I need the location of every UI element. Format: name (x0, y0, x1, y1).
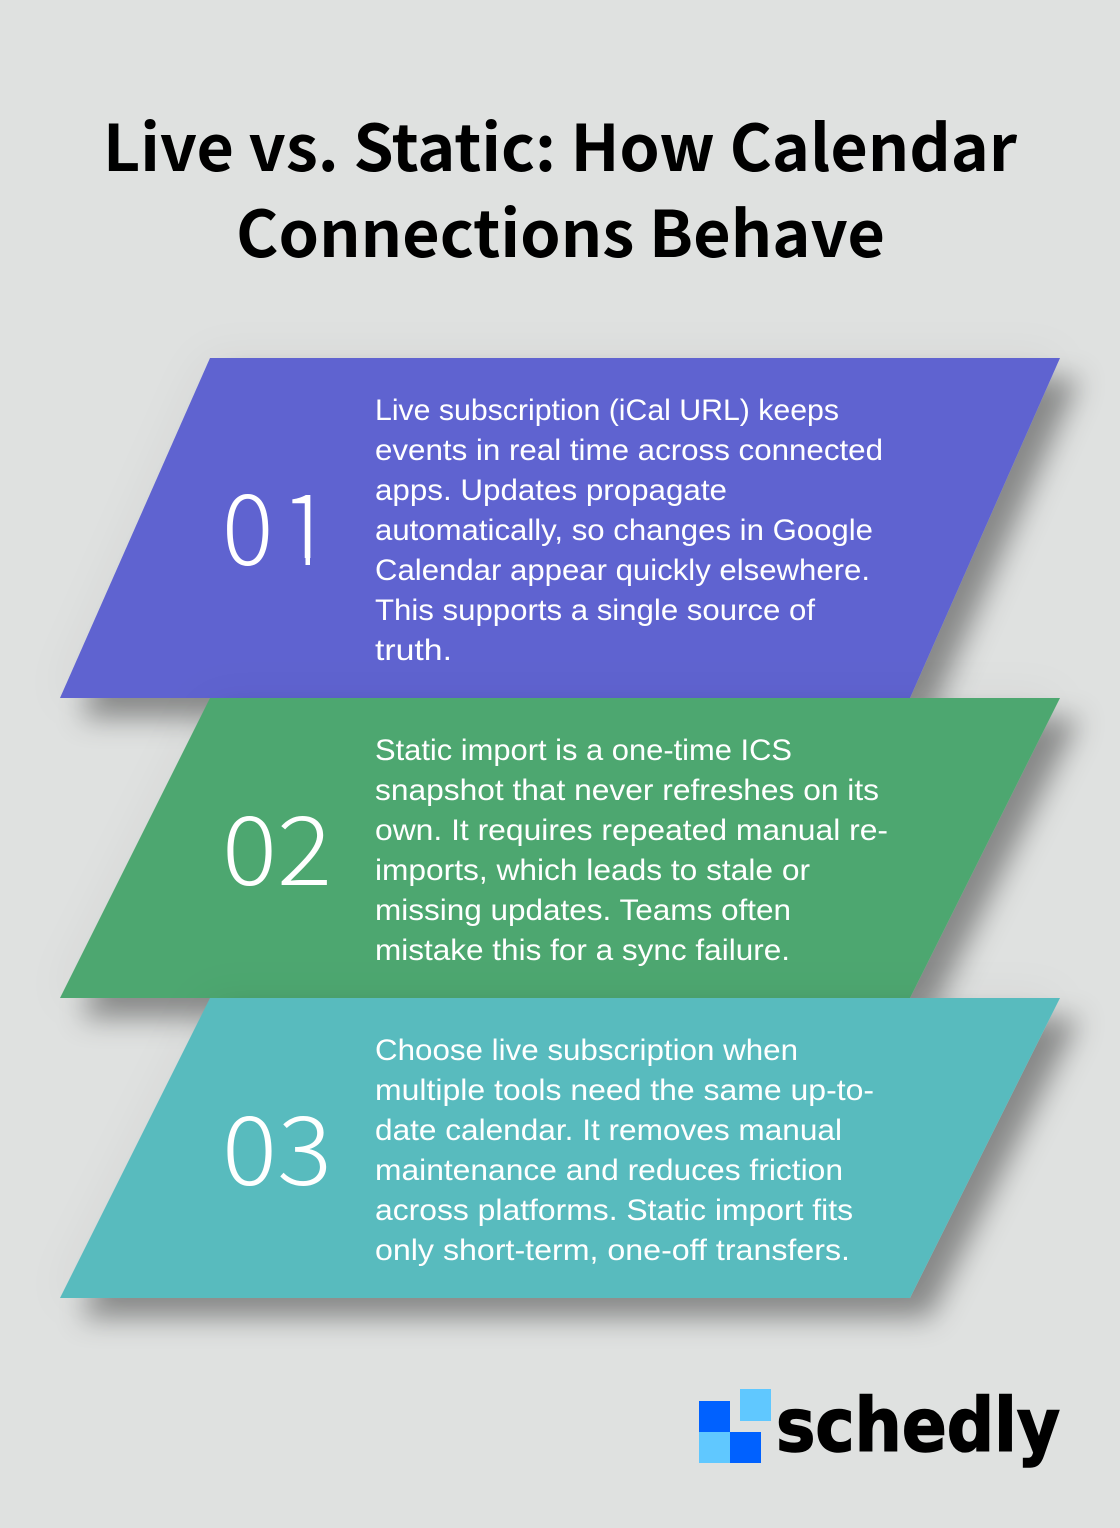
text block: live subscription: automatically, so changes in Google (375, 514, 873, 547)
text block: live subscription: This supports a single source of (375, 594, 816, 627)
panel: 01 live subscription (60, 358, 1060, 698)
title: Live vs. Static: How Calendar (103, 98, 1017, 190)
logo: schedly (699, 1383, 1060, 1469)
number 01: 1 (280, 454, 331, 593)
panel: 02 static import (60, 698, 1060, 998)
text block: live subscription: apps. Updates propagate (375, 474, 727, 507)
number 02: 02 (222, 774, 332, 913)
text block: choosing live: only short-term, one-off transfers. (375, 1234, 850, 1267)
text block: live subscription: Live subscription (iCal URL) keeps (375, 394, 839, 427)
text block: choosing live: across platforms. Static import fits (375, 1194, 853, 1227)
text block: static import: mistake this for a sync failure. (375, 934, 790, 967)
text block: static import: imports, which leads to stale or (375, 854, 810, 887)
panel shape: green parallelogram (60, 698, 1060, 998)
number 03: 03 (222, 1074, 332, 1213)
panel shape: purple parallelogram (60, 358, 1060, 698)
text block: live subscription (375, 394, 883, 667)
text block: static import: snapshot that never refreshes on its (375, 774, 879, 807)
number 01: 0 (222, 454, 273, 593)
text block: static import: Static import is a one-time ICS (375, 734, 792, 767)
text block: live subscription: truth. (375, 634, 452, 667)
text block: choosing live: multiple tools need the same up-to- (375, 1074, 874, 1107)
text block: choosing live: maintenance and reduces friction (375, 1154, 843, 1187)
panel shape: teal parallelogram (60, 998, 1060, 1298)
panel: 03 choosing live (60, 998, 1060, 1298)
text block: choosing live: date calendar. It removes manual (375, 1114, 842, 1147)
wordmark: schedly (776, 1383, 1060, 1469)
title: Connections Behave (236, 184, 885, 276)
text block: static import: own. It requires repeated manual re- (375, 814, 888, 847)
text block: static import (375, 734, 888, 967)
text block: live subscription: events in real time across connected (375, 434, 883, 467)
icon: logo squares (699, 1389, 771, 1463)
text block: static import: missing updates. Teams often (375, 894, 791, 927)
text block: choosing live: Choose live subscription when (375, 1034, 798, 1067)
text block: live subscription: Calendar appear quickly elsewhere. (375, 554, 870, 587)
text block: choosing live (375, 1034, 874, 1267)
title (103, 98, 1017, 276)
